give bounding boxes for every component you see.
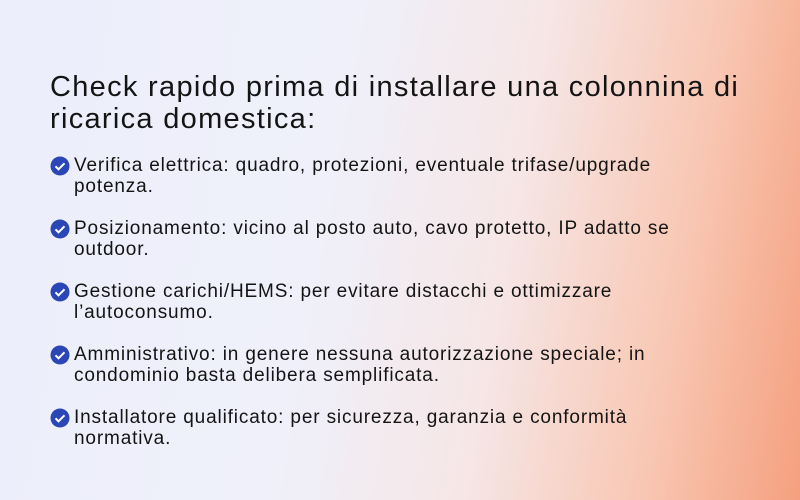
title: Check rapido prima di installare una colonnina di xyxy=(50,71,739,103)
item 2: outdoor. xyxy=(74,239,149,260)
item 4: condominio basta delibera semplificata. xyxy=(74,365,440,386)
item 3 xyxy=(50,281,612,323)
item 1: Verifica elettrica: quadro, protezioni, eventuale trifase/upgrade xyxy=(74,155,651,176)
item 4: Amministrativo: in genere nessuna autorizzazione speciale; in xyxy=(74,344,645,365)
item 4 xyxy=(50,344,645,386)
item 2: Posizionamento: vicino al posto auto, cavo protetto, IP adatto se xyxy=(74,218,670,239)
icon: check badge xyxy=(50,156,70,176)
item 1 xyxy=(50,155,651,197)
item 3: Gestione carichi/HEMS: per evitare distacchi e ottimizzare xyxy=(74,281,612,302)
icon: check badge xyxy=(50,220,70,238)
title xyxy=(50,71,739,135)
item 1: potenza. xyxy=(74,176,154,197)
item 5: Installatore qualificato: per sicurezza, garanzia e conformità xyxy=(74,407,627,428)
item 3: l’autoconsumo. xyxy=(74,302,214,323)
item 5 xyxy=(50,407,627,449)
icon: check badge xyxy=(50,346,70,364)
item 5: normativa. xyxy=(74,428,171,449)
item 2 xyxy=(50,218,670,260)
icon: check badge xyxy=(50,408,70,428)
icon: check badge xyxy=(50,282,70,302)
title: ricarica domestica: xyxy=(50,103,316,135)
